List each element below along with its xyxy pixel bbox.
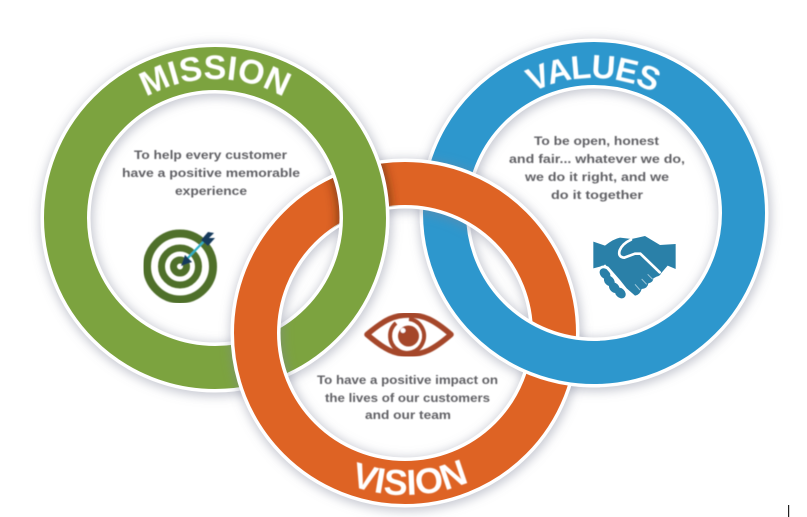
heading: vision: VISION bbox=[356, 459, 468, 496]
text: values statement: and fair... whatever we do, bbox=[509, 152, 685, 166]
ring crossing: values over vision bbox=[490, 286, 600, 388]
heading: values: VALUES bbox=[523, 54, 660, 90]
icon: target with arrow bbox=[147, 232, 215, 300]
text: vision statement: and our team bbox=[365, 408, 451, 422]
text: mission statement: To help every customer bbox=[134, 148, 287, 162]
text: mission statement: experience bbox=[175, 184, 247, 198]
icon: eye bbox=[367, 315, 451, 354]
text: mission statement: have a positive memorable bbox=[122, 166, 300, 180]
text: vision statement: To have a positive impact on bbox=[317, 373, 498, 387]
heading: mission: MISSION bbox=[138, 54, 292, 96]
corner mark bbox=[788, 505, 789, 517]
text: vision statement bbox=[317, 373, 498, 422]
icon: handshake bbox=[593, 236, 676, 301]
text: values statement: we do it right, and we bbox=[524, 170, 669, 184]
text: values statement: do it together bbox=[551, 188, 643, 202]
text: values statement: To be open, honest bbox=[534, 134, 659, 148]
text: mission statement bbox=[122, 148, 300, 198]
text: vision statement: the lives of our customers bbox=[325, 391, 490, 405]
ring: values bbox=[444, 64, 744, 364]
ring crossing: mission over vision bbox=[308, 130, 398, 250]
text: values statement bbox=[509, 134, 685, 202]
ring: mission bbox=[66, 68, 366, 370]
ring: vision bbox=[256, 184, 556, 484]
